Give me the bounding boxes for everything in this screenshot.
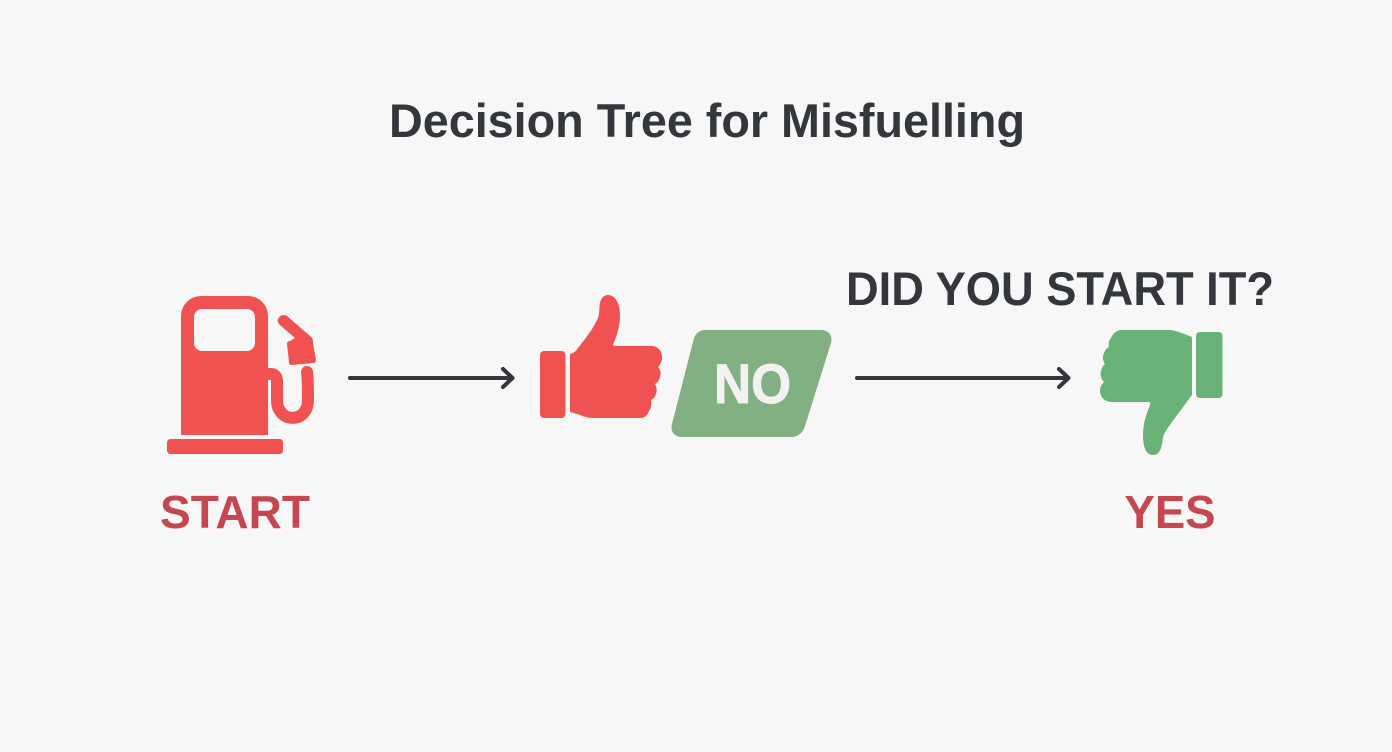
question label: DID YOU START IT? <box>846 262 1274 315</box>
badge: NO: NO <box>714 352 791 415</box>
arrow: start to thumbs up <box>350 369 512 387</box>
icon: thumbs up <box>540 295 662 418</box>
icon: thumbs down <box>1100 330 1222 455</box>
label: START: START <box>160 486 310 538</box>
title: Decision Tree for Misfuelling <box>389 94 1025 147</box>
label: YES: YES <box>1124 486 1216 538</box>
icon: fuel pump <box>167 296 316 454</box>
arrow: no to thumbs down <box>857 369 1068 387</box>
badge: NO <box>671 330 832 437</box>
